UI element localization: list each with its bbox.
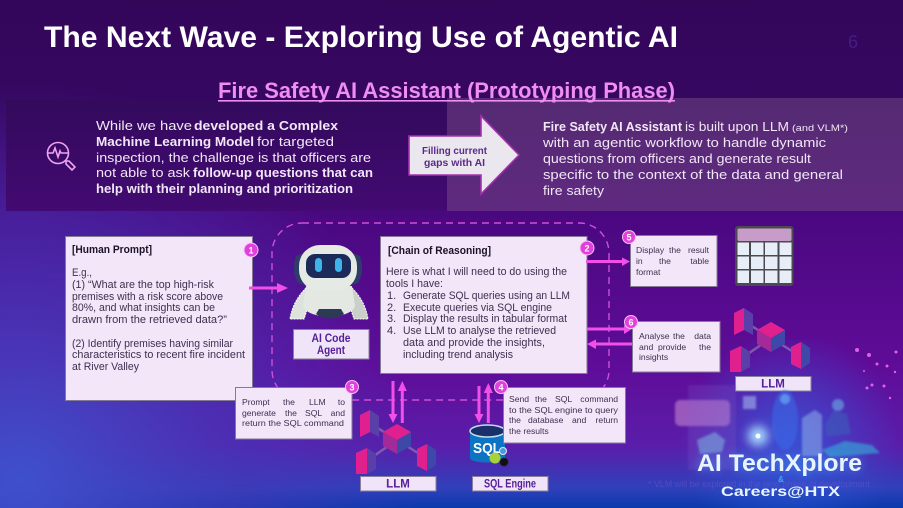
badge 4: 4 — [498, 382, 504, 392]
badge 6 — [624, 316, 638, 328]
callout 4: send SQL command: command — [580, 394, 618, 404]
label: AI Code Agent: Agent — [317, 345, 345, 357]
callout 4: send SQL command — [504, 388, 626, 443]
arrow: reasoning to analysis — [587, 325, 632, 334]
panel: chain of reasoning: Use LLM to analyse the retrieved — [403, 325, 556, 337]
icon: LLM network right — [730, 308, 810, 372]
label: LLM bottom — [360, 476, 436, 491]
callout 3: prompt the LLM: the — [283, 397, 295, 407]
panel: AI assistant description — [447, 98, 903, 211]
icon: SQL database: SQL — [473, 440, 501, 457]
callout 3: prompt the LLM — [236, 388, 352, 439]
badge 2: 2 — [584, 244, 590, 254]
icon: LLM network bottom — [356, 410, 436, 474]
badge 1 — [244, 243, 258, 257]
arrow: reasoning to table result — [586, 258, 630, 266]
panel: human prompt: (2) Identify premises having similar — [72, 338, 233, 350]
arrow: filling current gaps: gaps with AI — [424, 158, 485, 169]
text block: assistant: fire safety — [543, 183, 604, 198]
label: LLM right — [736, 376, 811, 391]
panel: human prompt — [66, 236, 252, 400]
callout 4: send SQL command: SQL — [555, 394, 572, 404]
arrow: prompt to agent — [249, 283, 288, 293]
callout 3: prompt the LLM: Prompt — [242, 397, 270, 407]
logo: AI TechXplore — [697, 450, 862, 499]
panel: chain of reasoning — [380, 236, 587, 374]
callout 3: prompt the LLM: LLM — [309, 397, 326, 407]
text block: assistant — [542, 119, 848, 198]
callout 4: send SQL command: return — [596, 415, 618, 425]
callout 6: analyse data: data — [694, 331, 711, 341]
panel: chain of reasoning: data and provide the insights, — [403, 337, 545, 349]
callout 6: analyse data: Analyse — [639, 331, 670, 341]
callout 4: send SQL command: Send — [509, 394, 529, 404]
panel: chain of reasoning: 1. — [387, 290, 396, 302]
callout 6: analyse data: the — [699, 342, 711, 352]
arrow: filling current gaps — [409, 116, 519, 194]
badge 3: 3 — [349, 382, 355, 392]
agent boundary — [272, 223, 609, 400]
text block: assistant: Fire Safety AI Assistant — [543, 119, 683, 134]
text block: assistant: specific to the context of the data and general — [543, 167, 843, 182]
callout 3: prompt the LLM: generate — [242, 408, 276, 418]
badge 3 — [346, 380, 358, 394]
text block: challenge: Machine Learning Model — [96, 134, 254, 149]
panel: chain of reasoning: Generate SQL queries using an LLM — [403, 290, 570, 302]
title: The Next Wave - Exploring Use of Agentic AI — [44, 21, 678, 54]
badge 5: 5 — [626, 232, 632, 242]
panel: human prompt: [Human Prompt] — [72, 244, 152, 256]
callout 4: send SQL command: the — [509, 415, 521, 425]
label: LLM right: LLM — [761, 378, 785, 390]
logo: AI TechXplore: AI TechXplore — [697, 450, 862, 477]
text block: challenge — [96, 118, 373, 196]
callout 5: display result: format — [636, 267, 661, 277]
callout 5: display result: the — [659, 256, 671, 266]
label: SQL Engine — [472, 476, 548, 491]
callout 5: display result: Display — [636, 245, 665, 255]
panel: human prompt: 80%, and what insights can be — [72, 302, 215, 314]
subtitle: Fire Safety AI Assistant (Prototyping Phase) — [218, 78, 675, 103]
text block: assistant: with an agentic workflow to handle dynamic — [542, 135, 826, 150]
panel: chain of reasoning: Display the results in tabular format — [403, 313, 567, 325]
label: LLM bottom: LLM — [386, 478, 410, 490]
callout 3: prompt the LLM: to — [338, 397, 345, 407]
callout 5: display result: table — [690, 256, 709, 266]
callout 5: display result: in — [636, 256, 643, 266]
badge 6: 6 — [628, 318, 634, 328]
icon: magnifier with pulse — [48, 142, 75, 170]
footnote (faint): * VLM will be explored in the next phase of development — [648, 479, 870, 489]
logo: AI TechXplore: AI TechXplore — [697, 450, 862, 477]
text block: challenge: inspection, the challenge is that officers are — [96, 150, 371, 165]
icon: SQL database — [470, 425, 508, 466]
arrows: reasoning and LLM — [388, 381, 407, 423]
panel: human prompt: E.g., — [72, 267, 92, 279]
callout 3: prompt the LLM: SQL — [305, 408, 322, 418]
callout 4: send SQL command: and — [572, 415, 587, 425]
panel: chain of reasoning: [Chain of Reasoning] — [388, 245, 491, 257]
callout 6: analyse data: provide — [658, 342, 686, 352]
panel: chain of reasoning: 3. — [387, 313, 396, 325]
callout 3: prompt the LLM: the — [285, 408, 297, 418]
callout 6: analyse data: insights — [639, 352, 668, 362]
icon: robot — [290, 245, 368, 319]
callout 5: display result: the — [669, 245, 681, 255]
panel: current challenge — [6, 100, 447, 211]
text block: challenge: for targeted — [257, 134, 334, 149]
panel: chain of reasoning: Here is what I will need to do using the — [386, 266, 567, 278]
badge 2 — [580, 241, 594, 255]
page number: 6 — [848, 32, 858, 52]
logo: AI TechXplore: Careers@HTX — [721, 483, 841, 499]
callout 4: send SQL command: the results — [509, 426, 549, 436]
panel: chain of reasoning: 4. — [387, 325, 396, 337]
panel: human prompt: at River Valley — [72, 361, 139, 373]
panel: chain of reasoning: including trend analysis — [403, 349, 513, 361]
logo: AI TechXplore: & — [778, 475, 784, 484]
callout 4: send SQL command: database — [528, 415, 564, 425]
text block: challenge: help with their planning and prioritization — [96, 181, 353, 196]
icon: table — [735, 226, 794, 286]
callout 3: prompt the LLM: return the SQL command — [242, 418, 344, 428]
label: AI Code Agent: AI Code — [312, 333, 350, 345]
callout 6: analyse data: and — [639, 342, 654, 352]
panel: human prompt: premises with a risk score above — [72, 291, 223, 303]
callout 6: analyse data — [632, 322, 720, 372]
callout 4: send SQL command: the — [535, 394, 547, 404]
panel: chain of reasoning: 2. — [387, 302, 396, 314]
label: SQL Engine: SQL Engine — [484, 478, 536, 490]
panel: chain of reasoning: tools I have: — [386, 278, 443, 290]
text block: challenge: follow-up questions that can — [193, 165, 373, 180]
badge 4 — [494, 380, 508, 394]
callout 3: prompt the LLM: and — [331, 408, 345, 418]
logo: background scene — [675, 348, 898, 470]
arrow: analysis back to reasoning — [587, 340, 632, 349]
text block: assistant: is built upon LLM — [685, 119, 789, 134]
callout 4: send SQL command: to the SQL engine to query — [509, 405, 619, 415]
panel: human prompt: drawn from the retrieved data?” — [72, 314, 227, 326]
label: AI Code Agent — [294, 330, 369, 359]
callout 6: analyse data: the — [673, 331, 685, 341]
panel: human prompt: characteristics to recent fire incident — [72, 349, 245, 361]
callout 5: display result: result — [688, 245, 710, 255]
text block: challenge: While we have — [96, 118, 192, 133]
badge 1: 1 — [248, 246, 254, 256]
badge 5 — [622, 230, 636, 244]
panel: chain of reasoning: Execute queries via SQL engine — [403, 302, 552, 314]
text block: assistant: (and VLM*) — [792, 123, 848, 134]
arrows: reasoning and SQL engine — [474, 383, 493, 423]
arrow: filling current gaps: Filling current — [422, 146, 488, 157]
text block: assistant: questions from officers and generate result — [543, 151, 811, 166]
text block: challenge: developed a Complex — [194, 118, 339, 133]
panel: human prompt: (1) “What are the top high-risk — [72, 279, 214, 291]
text block: challenge: not able to ask — [96, 165, 190, 180]
callout 5: display result — [630, 236, 717, 286]
